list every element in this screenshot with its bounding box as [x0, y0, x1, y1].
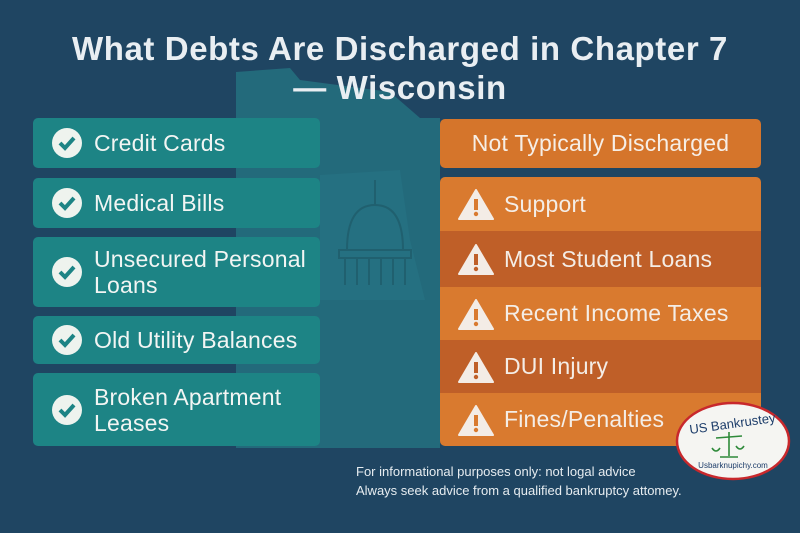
item: fines: Fines/Penalties	[504, 406, 664, 432]
item: fines	[440, 393, 761, 446]
panel: not discharged list	[440, 177, 761, 446]
item: support	[440, 177, 761, 231]
heading: not typically discharged	[440, 119, 761, 168]
item: leases: Leases	[94, 410, 169, 436]
item: unsecured loans: Unsecured Personal	[94, 246, 306, 272]
title: What Debts Are Discharged in Chapter 7	[72, 30, 728, 67]
item: credit cards: Credit Cards	[94, 130, 226, 156]
title	[72, 30, 728, 106]
item: credit cards	[33, 118, 320, 168]
item: unsecured loans: Loans	[94, 272, 158, 298]
icon: capitol dome	[338, 180, 412, 285]
stamp logo: US Bankrustey	[688, 410, 777, 437]
item: support: Support	[504, 190, 586, 216]
item: dui: DUI Injury	[504, 353, 608, 379]
item: income taxes: Recent Income Taxes	[504, 300, 729, 326]
item: leases	[33, 373, 320, 446]
item: medical bills	[33, 178, 320, 228]
heading: not typically discharged: Not Typically Discharged	[472, 130, 729, 156]
item: dui	[440, 340, 761, 393]
footer disclaimer: Always seek advice from a qualified bankruptcy attomey.	[356, 483, 682, 498]
footer disclaimer	[356, 464, 682, 498]
item: unsecured loans	[33, 237, 320, 307]
item: student loans: Most Student Loans	[504, 246, 712, 272]
item: medical bills: Medical Bills	[94, 190, 224, 216]
item: utility	[33, 316, 320, 364]
stamp logo: Usbarknupichy.com	[698, 461, 768, 470]
panel: discharged list	[33, 118, 320, 446]
item: utility: Old Utility Balances	[94, 327, 297, 353]
item: student loans	[440, 231, 761, 287]
stamp logo	[676, 402, 790, 480]
footer disclaimer: For informational purposes only: not logal advice	[356, 464, 636, 479]
title: — Wisconsin	[293, 69, 507, 106]
item: income taxes	[440, 287, 761, 340]
item: leases: Broken Apartment	[94, 384, 281, 410]
